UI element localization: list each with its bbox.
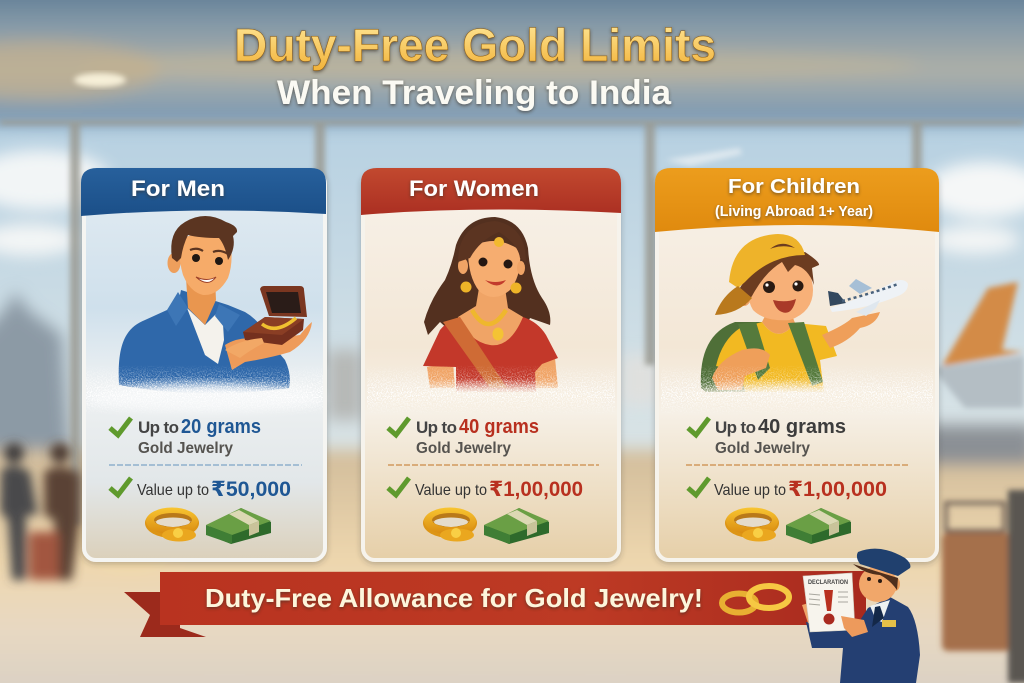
backpack: [701, 322, 762, 392]
neck: [762, 310, 795, 334]
panel: women: Gold Jewelry: [416, 440, 511, 457]
shirt: [187, 308, 224, 364]
arms: [427, 358, 558, 388]
divider: [388, 464, 599, 466]
box base: [243, 317, 304, 345]
face: [179, 233, 232, 295]
panel: children: 40 grams: [758, 416, 846, 438]
eyes: [867, 577, 871, 581]
box lid: [260, 286, 307, 317]
face: [859, 566, 897, 602]
text: value: Value up to: [415, 482, 487, 499]
thumb: [225, 338, 264, 358]
gold dust: [680, 385, 920, 411]
uniform: [806, 597, 920, 683]
panel: men: [81, 168, 326, 560]
panel: women: [361, 168, 621, 560]
ceiling light: [74, 73, 126, 87]
header: [361, 168, 621, 215]
check 2: [388, 478, 409, 495]
smile: [773, 299, 796, 313]
officer with declaration: [802, 549, 920, 683]
panel: children: [655, 168, 939, 560]
collar and tie: [870, 600, 890, 622]
smile: [196, 277, 216, 282]
header: [655, 168, 939, 232]
panel: children: ₹1,00,000: [788, 478, 887, 501]
heading: For Men: [131, 176, 225, 201]
hair: [735, 252, 819, 305]
face: [468, 241, 520, 297]
luggage right: [942, 490, 1024, 683]
icon: gold rings: [722, 586, 789, 612]
blurred airplane tail right: [932, 282, 1024, 408]
necklace: [472, 310, 506, 324]
neck: [186, 278, 216, 325]
illustration: boy with toy plane: [701, 234, 908, 392]
tikka: [494, 237, 504, 247]
heading: For Children: [728, 176, 860, 198]
card body: [84, 172, 325, 560]
text: grams: Up to: [416, 418, 457, 437]
arm on strap: [712, 348, 770, 390]
left strap: [738, 322, 770, 380]
ears: [458, 258, 468, 274]
travellers silhouettes: [0, 443, 80, 580]
title: [234, 19, 716, 112]
ear: [737, 288, 751, 306]
neck and chest: [458, 288, 523, 345]
ear: [890, 577, 900, 591]
blurred distant plane: [665, 148, 742, 166]
divider: [109, 464, 302, 466]
ear: [168, 253, 180, 273]
illustration: man with jewelry box: [119, 216, 312, 393]
eyes: [192, 254, 200, 262]
header: [81, 168, 326, 216]
check 1: [688, 418, 709, 435]
divider: [686, 464, 910, 466]
jacket: [119, 290, 290, 393]
panel: women: 40 grams: [459, 416, 539, 438]
text: grams: Up to: [715, 418, 756, 437]
text: value: Value up to: [714, 482, 786, 499]
left hand: [802, 602, 818, 623]
ribbon body: [160, 571, 866, 625]
sari drape: [443, 317, 507, 388]
hair: [171, 216, 237, 262]
heading: For Women: [409, 176, 539, 201]
illustration: woman with gold: [423, 217, 558, 392]
smile: [485, 280, 506, 286]
eyes: [478, 258, 488, 266]
window frames: [0, 120, 1024, 525]
face: [748, 262, 813, 320]
toy plane: [828, 279, 908, 316]
hair back: [424, 217, 550, 340]
cap: [729, 234, 805, 288]
badge: [882, 620, 896, 627]
banner text: Duty-Free Allowance for Gold Jewelry!: [205, 583, 703, 613]
hair top: [458, 221, 526, 262]
cap brim: [715, 286, 752, 315]
panel: women: ₹1,00,000: [489, 478, 583, 501]
title line 2: When Traveling to India: [277, 74, 672, 112]
icons: gold ring and cash: [145, 508, 271, 544]
t-shirt: [716, 322, 837, 392]
check 2: [110, 478, 131, 495]
collar: [167, 292, 240, 332]
panel: children: Gold Jewelry: [715, 440, 810, 457]
card body: [657, 172, 937, 560]
blouse: [423, 317, 558, 392]
hair: [853, 564, 898, 590]
forearm: [225, 322, 312, 370]
icons: gold ring and cash: [725, 508, 851, 544]
gold dust: [372, 385, 608, 411]
text: grams: Up to: [138, 418, 179, 437]
card body: [363, 172, 619, 560]
banner: [124, 571, 866, 637]
ribbon tail: [124, 592, 206, 637]
check 1: [110, 418, 131, 435]
snow dust: [87, 384, 323, 412]
panel: men: 20 grams: [181, 416, 261, 438]
subheading: (Living Abroad 1+ Year): [715, 204, 873, 220]
cap: [857, 549, 910, 576]
check 2: [688, 478, 709, 495]
brows: [190, 249, 228, 254]
icons: gold ring and cash: [423, 508, 549, 544]
right hand: [841, 616, 868, 637]
declaration paper: DECLARATION: [808, 579, 848, 586]
arm with plane: [822, 312, 880, 348]
earrings: [460, 282, 472, 292]
panel: men: Gold Jewelry: [138, 440, 233, 457]
panel: men: ₹50,000: [211, 478, 291, 501]
eyes: [763, 281, 775, 293]
title line 1: Duty-Free Gold Limits: [234, 19, 716, 71]
right strap: [788, 322, 823, 386]
text: value: Value up to: [137, 482, 209, 499]
check 1: [388, 418, 409, 435]
